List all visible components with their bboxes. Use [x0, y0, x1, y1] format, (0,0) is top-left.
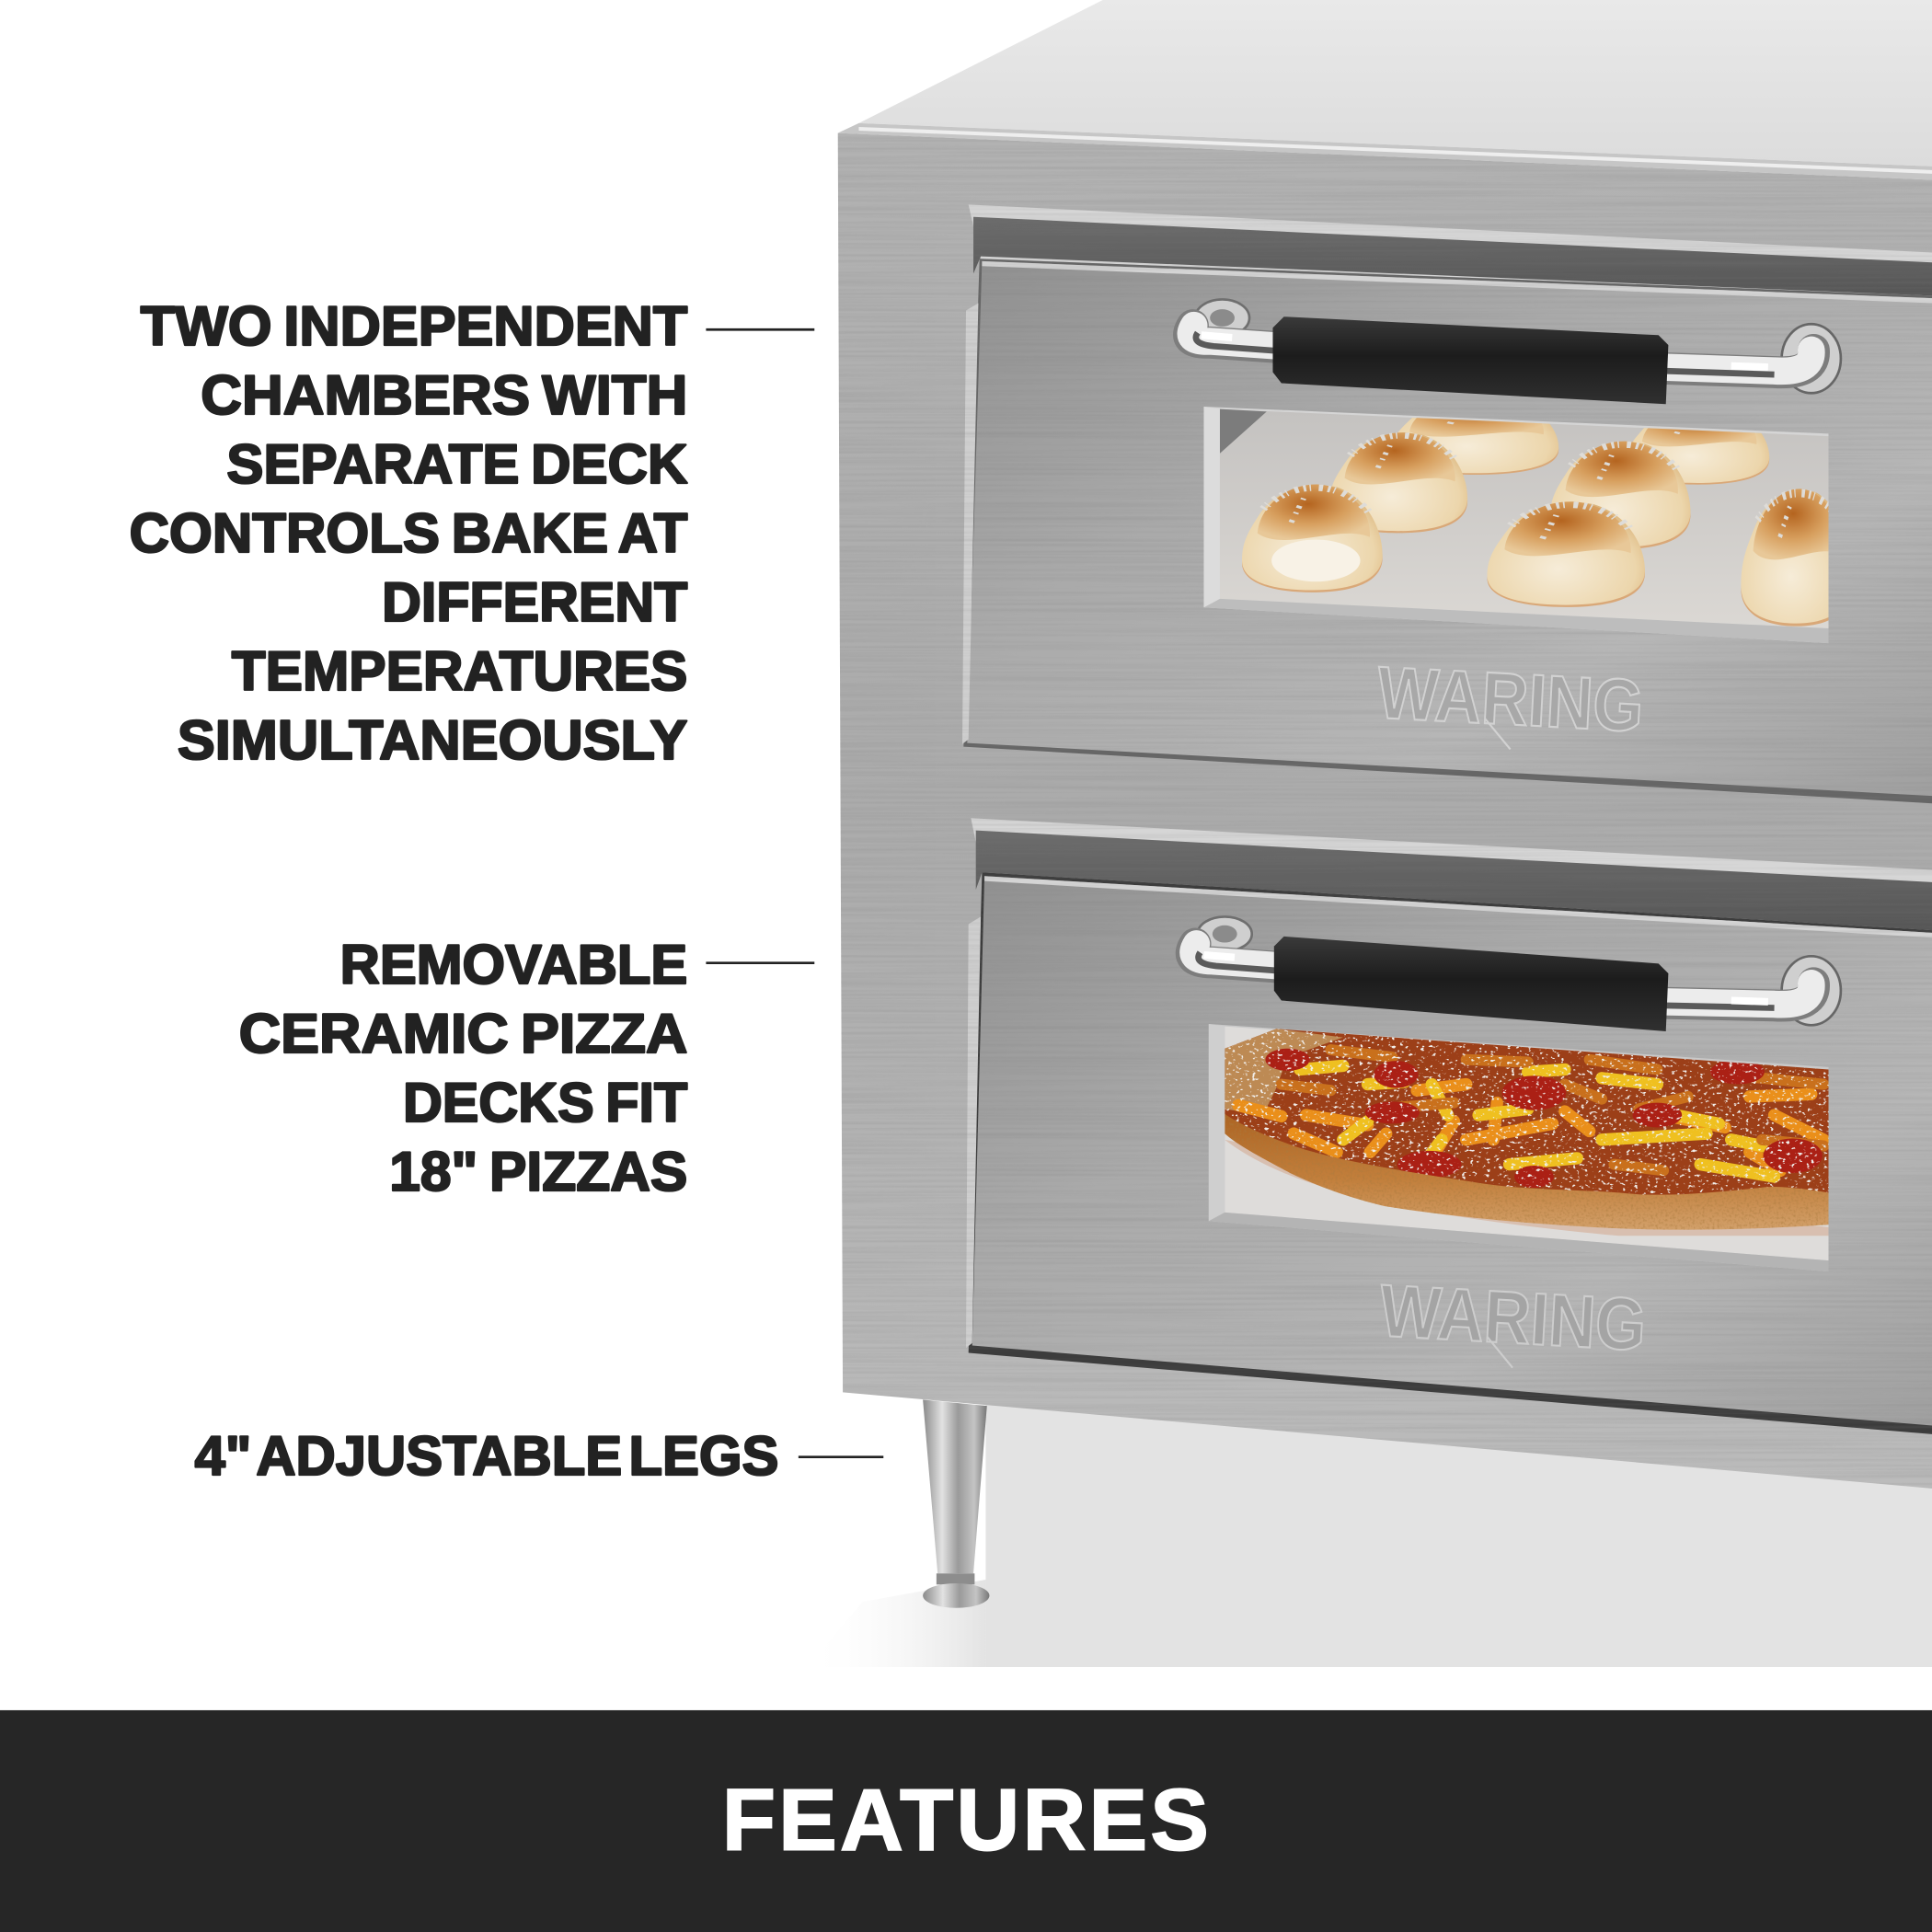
- callout: ceramic pizza decks: 18" PIZZAS: [389, 1140, 687, 1202]
- upper door logo: WARING: [1375, 651, 1646, 748]
- floor shadow: [807, 1405, 1932, 1667]
- upper door handle: [1189, 299, 1841, 404]
- upper door panel: [962, 204, 1932, 803]
- lower door handle: [1191, 916, 1841, 1031]
- callout: ceramic pizza decks: CERAMIC PIZZA: [239, 1002, 687, 1064]
- adjustable leg: [923, 1399, 989, 1608]
- callout: two independent chambers: [130, 294, 688, 771]
- callout: ceramic pizza decks: DECKS FIT: [403, 1071, 688, 1133]
- callout: two independent chambers: DIFFERENT: [382, 570, 688, 633]
- oven body front: [838, 133, 1932, 1489]
- lower door panel: [966, 818, 1932, 1434]
- callout: two independent chambers: CHAMBERS WITH: [201, 363, 687, 426]
- footer title: FEATURES: [722, 1771, 1209, 1869]
- lower door logo: WARING: [1378, 1270, 1648, 1367]
- oven unit: [838, 0, 1932, 1489]
- callout: two independent chambers: SEPARATE DECK: [226, 432, 687, 495]
- callout: adjustable legs: 4" ADJUSTABLE LEGS: [195, 1424, 778, 1487]
- callout: ceramic pizza decks: [239, 933, 688, 1202]
- callout: two independent chambers: CONTROLS BAKE AT: [130, 501, 688, 564]
- footer banner: [0, 1710, 1932, 1932]
- leader line: legs: [799, 1456, 883, 1458]
- callout: ceramic pizza decks: REMOVABLE: [340, 933, 687, 995]
- leader line: pizza decks: [706, 962, 814, 964]
- oven top surface: [858, 0, 1932, 167]
- lower window with pizza: [1209, 1024, 1829, 1271]
- brushed steel texture: [838, 133, 1932, 1489]
- callout: two independent chambers: TWO INDEPENDENT: [141, 294, 688, 357]
- callout: two independent chambers: SIMULTANEOUSLY: [178, 708, 687, 771]
- leader line: chambers: [706, 328, 814, 330]
- callout: two independent chambers: TEMPERATURES: [232, 639, 687, 702]
- upper window with garlic knots: [1203, 397, 1852, 643]
